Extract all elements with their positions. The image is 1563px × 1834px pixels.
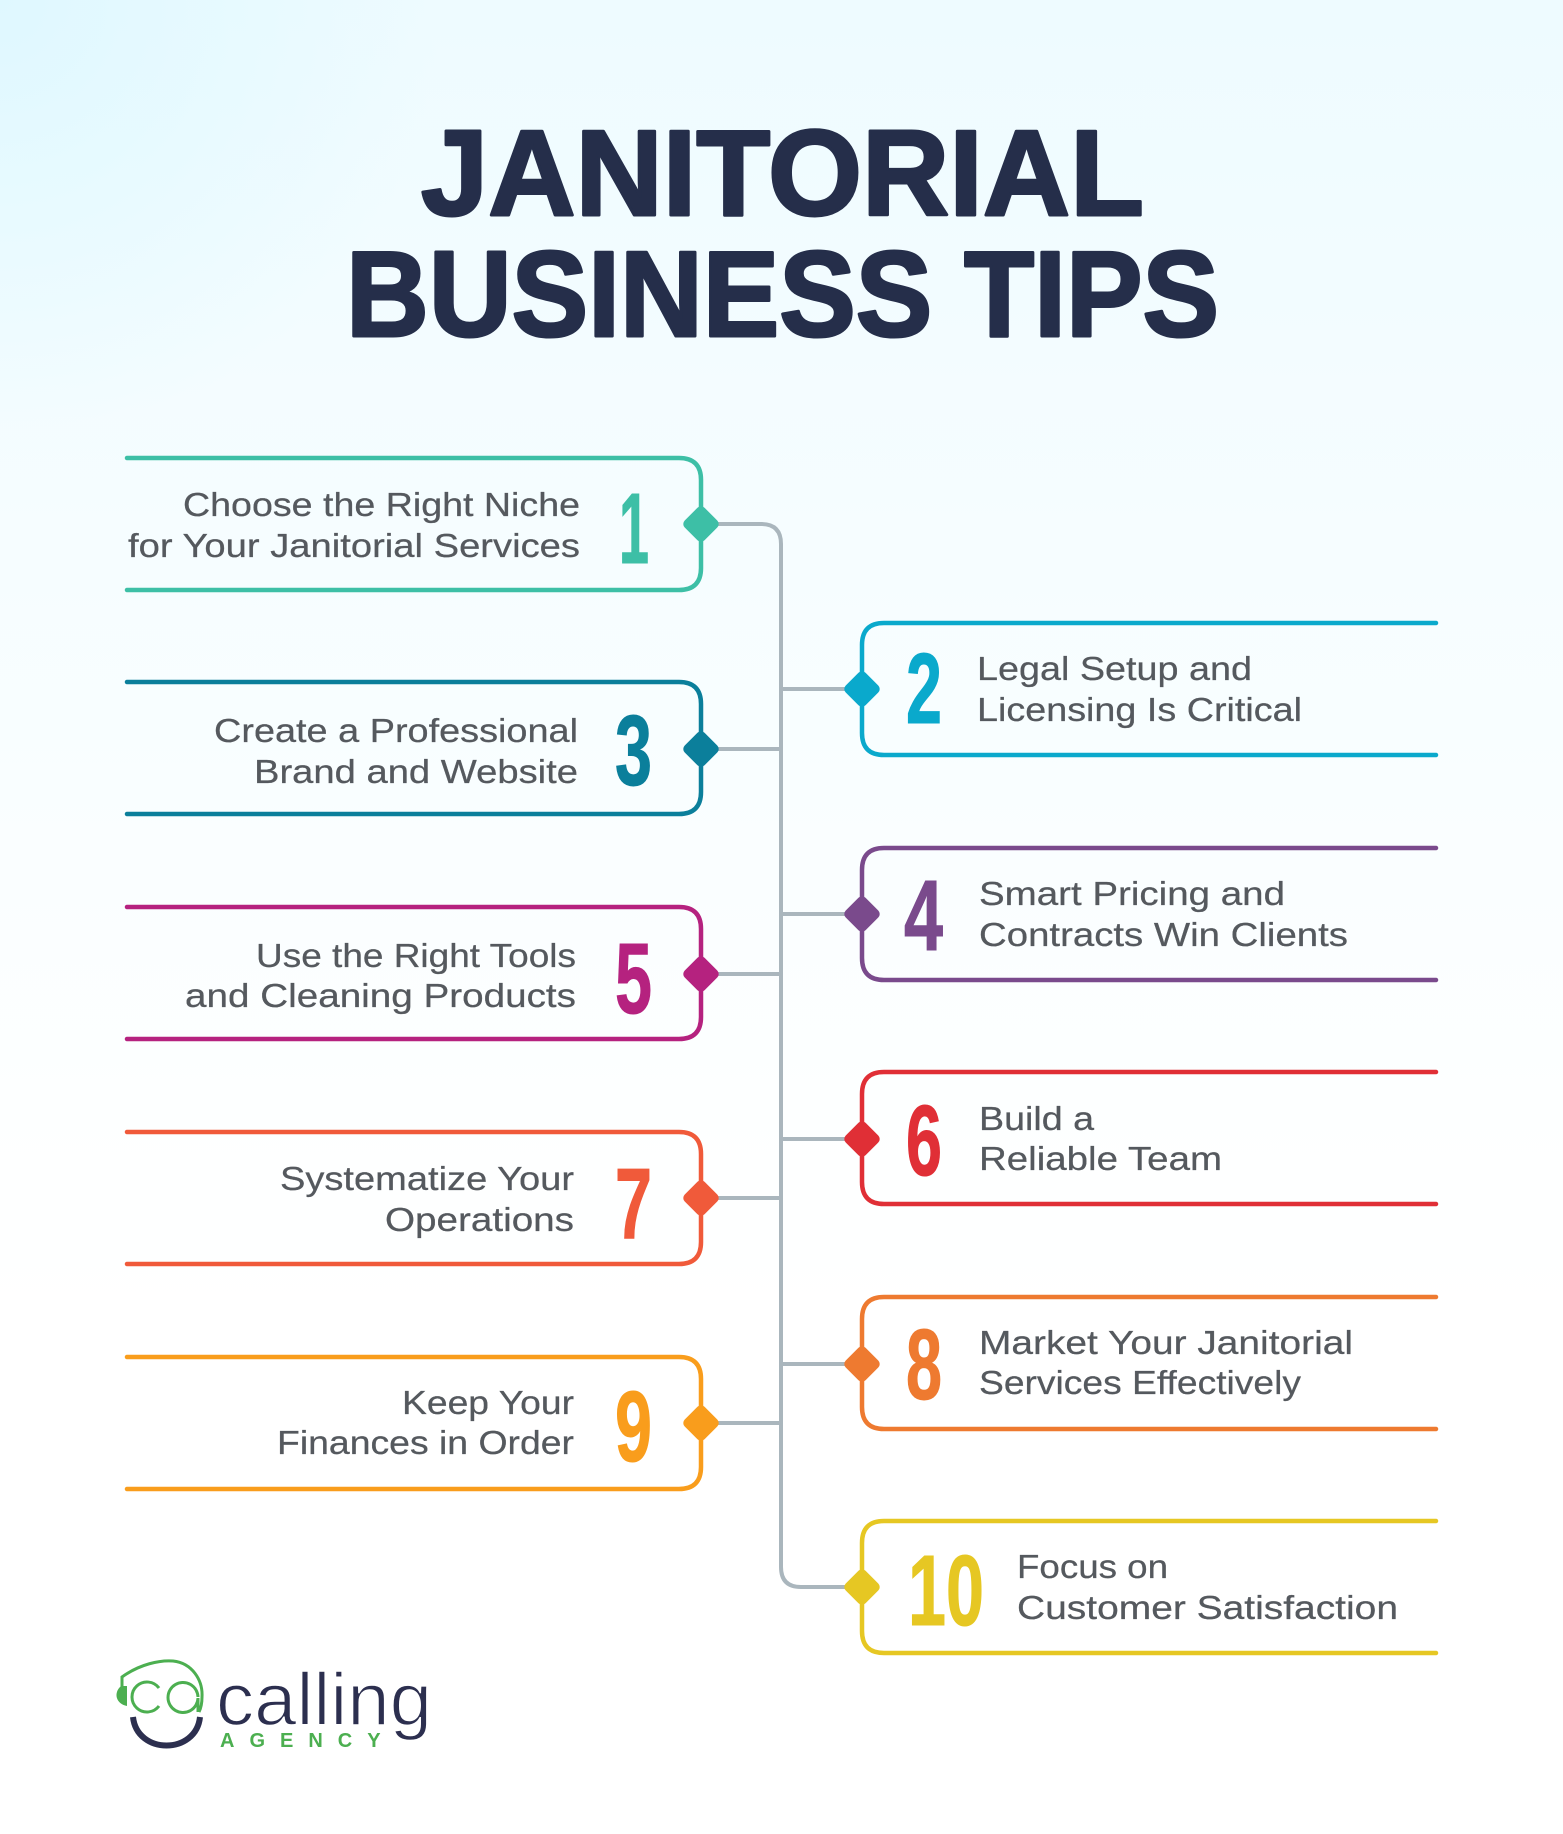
tip 7 marker xyxy=(681,1178,721,1218)
tip 7 text xyxy=(280,1160,574,1238)
logo tagline: AGENCY xyxy=(220,1730,396,1752)
tip 10 text: Customer Satisfaction xyxy=(1017,1589,1398,1626)
tip 10 marker xyxy=(842,1567,882,1607)
tip 7 outline xyxy=(127,1132,701,1264)
tip 8 number: 8 xyxy=(906,1309,942,1421)
panel: tip 8 xyxy=(842,1297,1436,1429)
tip 7 number: 7 xyxy=(615,1148,652,1260)
logo: Calling Agency xyxy=(116,1658,432,1752)
tip 9 outline xyxy=(127,1357,701,1489)
tip 6 outline xyxy=(862,1072,1436,1204)
tip 9 text xyxy=(277,1384,574,1461)
tip 8 text: Market Your Janitorial xyxy=(979,1324,1353,1361)
tip 1 number: 1 xyxy=(619,473,649,585)
tip 7 text: Operations xyxy=(385,1201,574,1238)
title xyxy=(346,105,1219,362)
tip 5 text xyxy=(185,937,576,1014)
title: JANITORIAL xyxy=(421,105,1144,241)
tip 5 text: Use the Right Tools xyxy=(256,937,576,974)
logo wordmark: calling xyxy=(216,1658,432,1741)
tip 10 number: 10 xyxy=(908,1535,984,1647)
tip 3 marker xyxy=(681,729,721,769)
panel: tip 3 xyxy=(127,682,721,814)
panel: tip 7 xyxy=(127,1132,721,1264)
connector lines xyxy=(701,524,862,1587)
tip 2 number: 2 xyxy=(906,633,942,745)
tip 1 text: for Your Janitorial Services xyxy=(128,527,580,564)
tip 3 number: 3 xyxy=(615,695,652,807)
tip 10 outline xyxy=(862,1521,1436,1653)
tip 2 text: Licensing Is Critical xyxy=(977,691,1302,728)
title: BUSINESS TIPS xyxy=(346,226,1219,362)
tip 8 marker xyxy=(842,1344,882,1384)
tip 10 text: Focus on xyxy=(1017,1548,1168,1585)
tip 7 text: Systematize Your xyxy=(280,1160,574,1197)
tip 3 text: Brand and Website xyxy=(254,753,578,790)
panel: tip 1 xyxy=(127,458,721,590)
tip 2 marker xyxy=(842,669,882,709)
tip 4 number: 4 xyxy=(904,860,943,972)
tip 8 outline xyxy=(862,1297,1436,1429)
tip 4 marker xyxy=(842,894,882,934)
tip 4 text xyxy=(979,875,1348,953)
tip 6 number: 6 xyxy=(906,1085,942,1197)
tip 9 marker xyxy=(681,1403,721,1443)
tip 2 text: Legal Setup and xyxy=(977,650,1252,687)
tip 5 outline xyxy=(127,907,701,1039)
tip 6 text: Build a xyxy=(979,1100,1095,1137)
panel: tip 5 xyxy=(127,907,721,1039)
icon: headset smile xyxy=(116,1661,202,1746)
tip 2 outline xyxy=(862,623,1436,755)
panel: tip 6 xyxy=(842,1072,1436,1204)
panel: tip 9 xyxy=(127,1357,721,1489)
tip 9 number: 9 xyxy=(615,1371,652,1483)
tip 10 text xyxy=(1017,1548,1398,1626)
tip 3 outline xyxy=(127,682,701,814)
tip 9 text: Keep Your xyxy=(402,1384,574,1421)
panel: tip 10 xyxy=(842,1521,1436,1653)
tip 9 text: Finances in Order xyxy=(277,1424,574,1461)
panel: tip 4 xyxy=(842,848,1436,980)
tip 5 marker xyxy=(681,954,721,994)
tip 3 text: Create a Professional xyxy=(214,712,578,749)
panel: tip 2 xyxy=(842,623,1436,755)
tip 1 outline xyxy=(127,458,701,590)
tip 6 marker xyxy=(842,1119,882,1159)
tip 1 text xyxy=(128,486,580,564)
tip 1 marker xyxy=(681,504,721,544)
tip 1 text: Choose the Right Niche xyxy=(183,486,580,523)
tip 8 text xyxy=(979,1324,1353,1401)
tip 5 number: 5 xyxy=(615,923,652,1035)
tip 5 text: and Cleaning Products xyxy=(185,977,576,1014)
tip 3 text xyxy=(214,712,578,790)
tip 2 text xyxy=(977,650,1302,728)
tip 6 text: Reliable Team xyxy=(979,1140,1222,1177)
tip 4 text: Smart Pricing and xyxy=(979,875,1285,912)
tip 6 text xyxy=(979,1100,1222,1177)
tip 8 text: Services Effectively xyxy=(979,1364,1302,1401)
tip 4 outline xyxy=(862,848,1436,980)
tip 4 text: Contracts Win Clients xyxy=(979,916,1348,953)
